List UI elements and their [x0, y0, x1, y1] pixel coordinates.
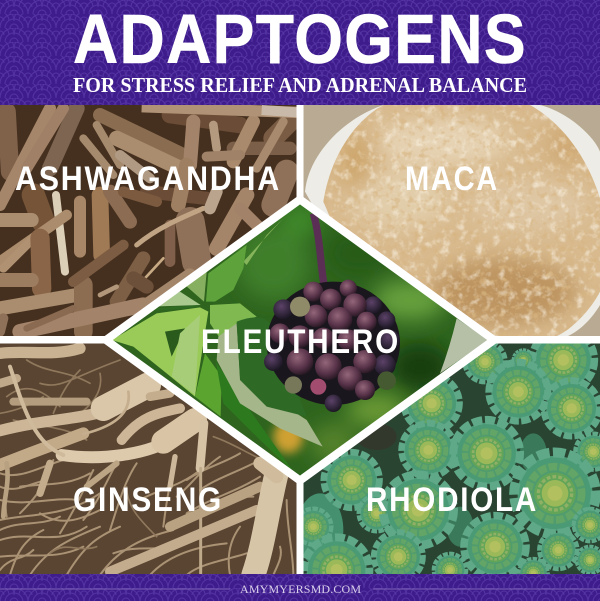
label: ashwagandha: ASHWAGANDHA [15, 160, 281, 198]
panel: ashwagandha roots photo [0, 105, 300, 340]
berry cluster [264, 280, 400, 412]
label: maca: MACA [405, 160, 499, 198]
panel: eleuthero center diamond [100, 190, 500, 490]
white cross dividers [0, 105, 600, 575]
panel: ginseng roots photo [0, 343, 300, 575]
label: eleuthero: ELEUTHERO [201, 323, 400, 361]
panel: rhodiola rosettes photo [304, 344, 600, 574]
pale background patch [440, 318, 488, 373]
label: ginseng: GINSENG [73, 481, 223, 519]
subtitle: FOR STRESS RELIEF AND ADRENAL BALANCE [73, 73, 527, 97]
footer website text: AMYMYERSMD.COM [240, 582, 361, 596]
header band [0, 0, 600, 105]
leaves [112, 218, 323, 472]
footer band [0, 574, 600, 601]
panel: maca powder in a white bowl [300, 105, 600, 340]
label: rhodiola: RHODIOLA [366, 481, 538, 519]
title: ADAPTOGENS [73, 0, 527, 78]
stem [313, 213, 324, 285]
